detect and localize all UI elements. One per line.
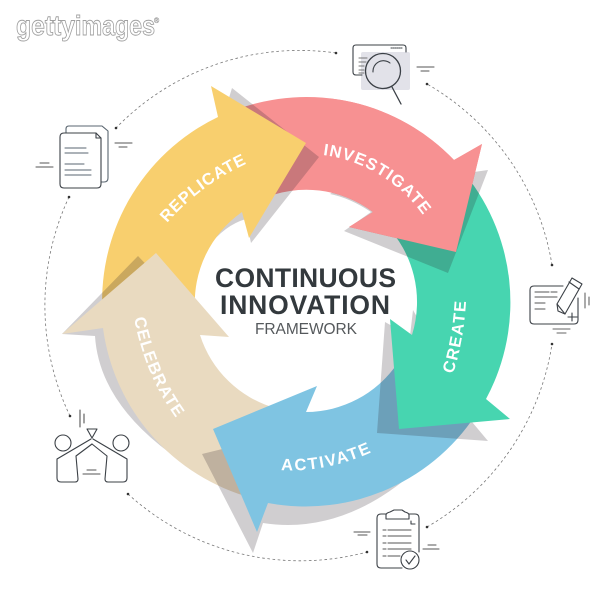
arrow: create <box>377 184 510 441</box>
center title: CONTINUOUS <box>215 263 396 293</box>
arrow: celebrate: CELEBRATE <box>135 317 184 418</box>
arrow: investigate body <box>235 97 482 252</box>
arrow: replicate <box>102 86 319 300</box>
center title: FRAMEWORK <box>255 321 358 338</box>
center title: INNOVATION <box>220 290 390 320</box>
watermark: gettyimages: images <box>75 10 155 41</box>
icon: stacked documents <box>36 126 132 188</box>
icon: magnifier over document <box>353 45 434 104</box>
arrow: investigate head: INVESTIGATE <box>324 144 432 214</box>
icon: clipboard with check <box>354 510 439 569</box>
dashed connector ring <box>45 50 553 561</box>
watermark: gettyimages: getty <box>16 10 75 41</box>
arrow: activate: ACTIVATE <box>282 442 371 470</box>
arrow: celebrate <box>62 253 268 495</box>
watermark: gettyimages <box>16 10 160 41</box>
center title <box>215 263 396 338</box>
arrow: create: CREATE <box>443 302 466 372</box>
arrow: activate <box>202 368 470 553</box>
arrow: replicate: REPLICATE <box>160 154 246 222</box>
watermark: gettyimages: ® <box>154 17 160 25</box>
icon: high five <box>55 410 129 482</box>
arrow: investigate head <box>324 98 488 273</box>
icon: note and pencil <box>530 278 589 333</box>
